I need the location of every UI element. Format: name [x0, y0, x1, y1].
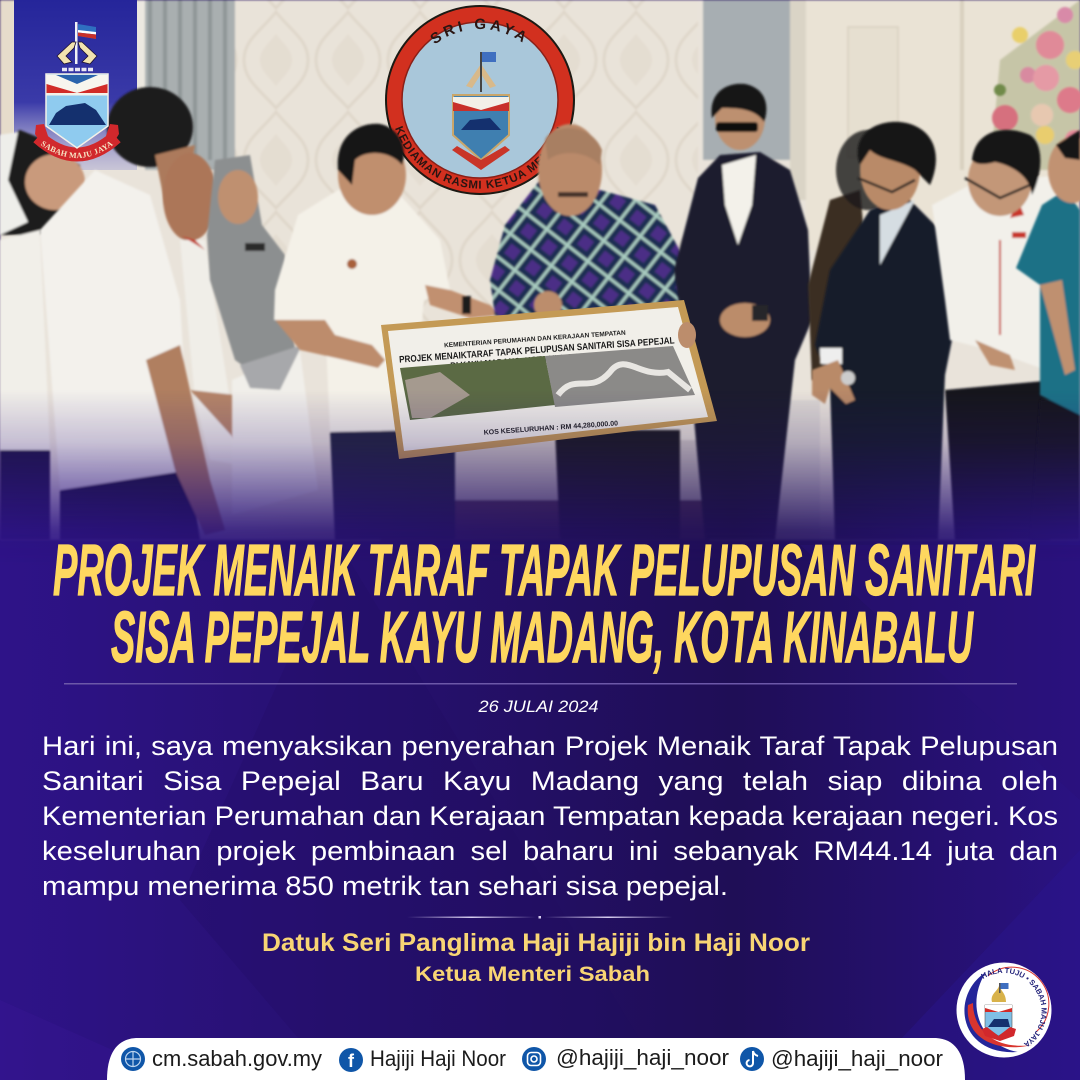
- Instagram link: @hajiji_haji_noor: [556, 1045, 729, 1070]
- person: man in dark jacket looking down: [812, 122, 960, 540]
- framed project board: DI KAYU MADANG, KOTA KINABALU, SABAH: [450, 349, 624, 370]
- person: man with red collar: [163, 153, 262, 465]
- crest arms: [57, 42, 97, 64]
- person: man in teal shirt at right edge: [1016, 130, 1080, 540]
- footer social bar: [107, 1038, 965, 1080]
- emblem: Sri Gaya residence crest: SRI GAYA: [430, 18, 525, 44]
- banner behind Sabah crest: [14, 0, 137, 170]
- flowers: pink and yellow bouquet: [990, 0, 1080, 170]
- round badge: Hala Tuju Sabah Maju Jaya: [956, 962, 1052, 1058]
- Facebook link: f: [348, 1051, 355, 1071]
- body paragraph: Kementerian Perumahan dan Kerajaan Tempatan kepada kerajaan negeri. Kos: [42, 801, 1058, 831]
- body paragraph: mampu menerima 850 metrik tan sehari sisa pepejal.: [42, 871, 728, 901]
- person: minister in white shirt: [274, 124, 500, 540]
- framed project board: [381, 300, 717, 459]
- Sabah coat of arms: [33, 22, 121, 162]
- person: man in white shirt seen from behind: [40, 87, 225, 540]
- framed project board: PROJEK MENAIKTARAF TAPAK PELUPUSAN SANITARI SISA PEPEJAL: [399, 335, 675, 366]
- shield: [46, 74, 108, 148]
- framed project board: KEMENTERIAN PERUMAHAN DAN KERAJAAN TEMPATAN: [444, 330, 626, 349]
- body paragraph: Hari ini, saya menyaksikan penyerahan Projek Menaik Taraf Tapak Pelupusan: [42, 731, 1058, 761]
- speaker position: Ketua Menteri Sabah: [415, 963, 650, 986]
- hand holding board: [678, 322, 696, 348]
- title divider: [64, 683, 1017, 684]
- signature divider: [407, 916, 672, 918]
- Facebook link: Hajiji Haji Noor: [370, 1046, 506, 1071]
- person: man in dark suit with glasses: [674, 84, 812, 540]
- body paragraph: [42, 731, 1058, 901]
- framed project board: KOS KESELURUHAN : RM 44,280,000.00: [484, 420, 618, 437]
- person: young man in white uniform with red trim: [932, 130, 1060, 540]
- emblem: Sri Gaya residence crest: [385, 5, 575, 195]
- TikTok link: @hajiji_haji_noor: [771, 1046, 943, 1071]
- person: woman far left in white jacket: [0, 130, 85, 540]
- title: [53, 531, 1036, 678]
- flag on staff: [75, 22, 96, 64]
- website link: cm.sabah.gov.my: [152, 1046, 322, 1071]
- speaker name: Datuk Seri Panglima Haji Hajiji bin Haji Noor: [262, 929, 810, 957]
- person: Chief Minister in batik shirt: [490, 124, 698, 540]
- round badge: Hala Tuju Sabah Maju Jaya: HALA TUJU • SABAH MAJU JAYA: [980, 968, 1047, 1046]
- emblem: Sri Gaya residence crest: KEDIAMAN RASMI KETUA MENTERI: [395, 126, 560, 189]
- person: woman behind in floral dress: [808, 130, 900, 380]
- date: 26 JULAI 2024: [477, 698, 598, 716]
- photo: ceremony handover scene: [0, 0, 1080, 540]
- crest beads: [62, 68, 93, 71]
- dark purple text panel fading over photo: [0, 380, 1080, 1080]
- person: woman in grey hijab: [207, 155, 318, 515]
- photo background: room wall, curtains and door: [0, 0, 1080, 540]
- body paragraph: Sanitari Sisa Pepejal Baru Kayu Madang yang telah siap dibina oleh: [42, 766, 1058, 796]
- body paragraph: keseluruhan projek pembinaan sel baharu ini sebanyak RM44.14 juta dan: [42, 836, 1058, 866]
- motto ribbon: SABAH MAJU JAYA: [40, 141, 114, 158]
